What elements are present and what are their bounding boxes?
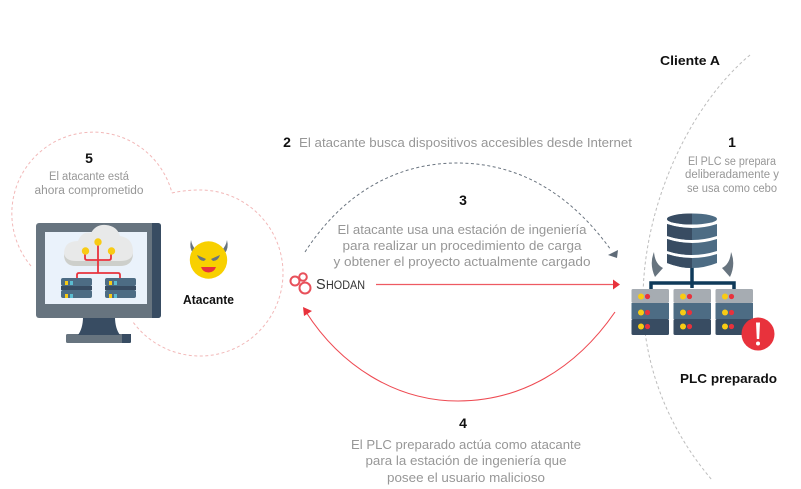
step 4 text: para la estación de ingeniería que	[366, 453, 566, 468]
step 2 text: 2	[283, 134, 291, 150]
step 5 text	[34, 150, 144, 197]
cloud	[64, 225, 133, 266]
status lights	[638, 294, 728, 330]
step 1 text	[685, 134, 779, 195]
label: PLC preparado: PLC preparado	[680, 372, 777, 386]
step 3 text: El atacante usa una estación de ingeniería	[338, 222, 587, 237]
step 3 text: y obtener el proyecto actualmente cargado	[334, 254, 590, 269]
step 2 text: El atacante busca dispositivos accesibles desde Internet	[299, 135, 632, 150]
step 1 text: deliberadamente y	[685, 169, 779, 181]
icon: database with PLC racks	[632, 214, 774, 350]
step 3 text: para realizar un procedimiento de carga	[342, 238, 582, 253]
step 5 text: El atacante está	[49, 171, 130, 183]
side arrows	[652, 252, 663, 277]
step 5 text: 5	[85, 150, 93, 166]
arrow: PLC back to attacker	[303, 307, 615, 401]
Shodan logo: HODAN	[326, 280, 365, 292]
step 3 text	[334, 192, 590, 269]
step 5 text: ahora comprometido	[34, 185, 144, 197]
servers	[61, 278, 136, 298]
step 1 text: se usa como cebo	[687, 183, 777, 195]
step 1 text: El PLC se prepara	[688, 156, 777, 168]
arrow: dashed scan from Shodan to PLC	[305, 163, 618, 258]
dashed circle: attacker network	[12, 132, 283, 356]
connectors	[651, 266, 734, 290]
label: Atacante: Atacante	[183, 293, 234, 307]
step 4 text: 4	[459, 415, 467, 431]
arrow: upload from Shodan to PLC	[376, 280, 620, 290]
network lines	[77, 242, 120, 279]
icon: devil face	[190, 240, 228, 279]
step 4 text	[351, 415, 581, 485]
label: Cliente A: Cliente A	[660, 53, 721, 68]
Shodan logo	[290, 273, 365, 294]
Shodan logo: S	[316, 277, 326, 293]
rack columns	[632, 289, 753, 335]
dashed boundary: Cliente A	[643, 55, 750, 480]
step 4 text: posee el usuario malicioso	[387, 470, 545, 485]
icon: alert badge	[742, 318, 774, 350]
step 4 text: El PLC preparado actúa como atacante	[351, 437, 581, 452]
database	[667, 214, 717, 268]
step 3 text: 3	[459, 192, 467, 208]
icon: monitor with cloud network	[36, 223, 161, 343]
step 1 text: 1	[728, 134, 736, 150]
